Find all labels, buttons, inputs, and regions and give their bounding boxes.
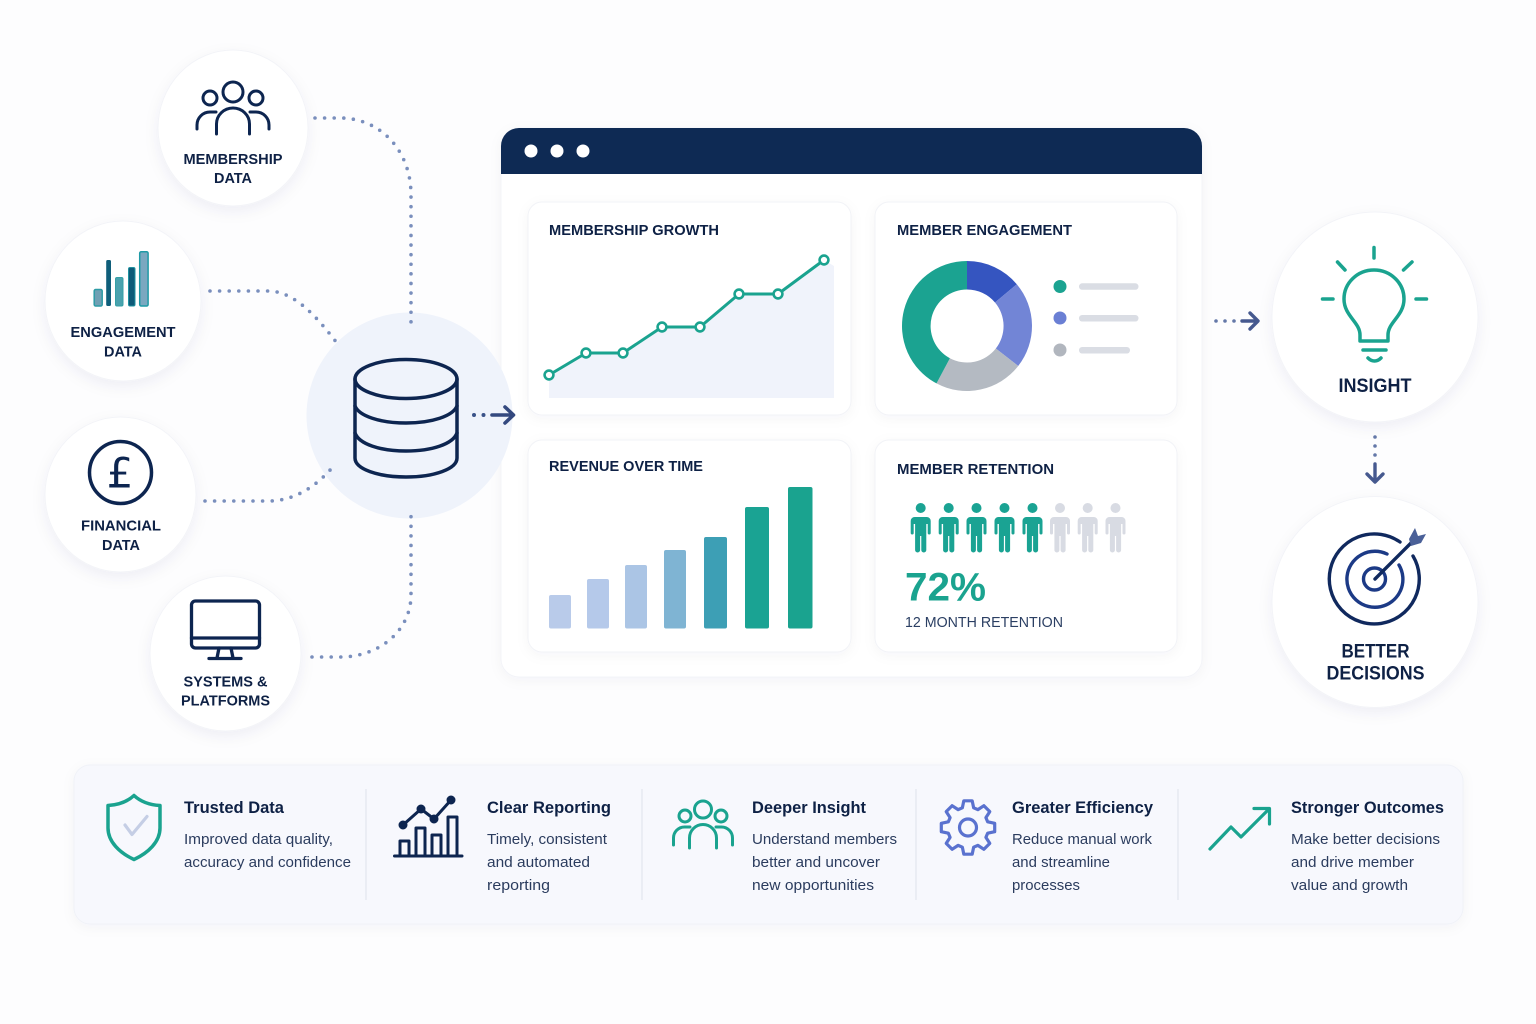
description: and drive member	[1291, 854, 1414, 871]
icon: pound coin	[90, 442, 152, 504]
label: FINANCIAL	[81, 518, 161, 534]
label: DATA	[214, 170, 252, 187]
heading: MEMBER ENGAGEMENT	[897, 222, 1072, 239]
outcome: better decisions	[1272, 496, 1478, 708]
connector: membership to database	[315, 118, 411, 322]
outcome: insight	[1272, 212, 1478, 422]
icon: target with arrow	[1329, 528, 1426, 624]
icon: bar chart	[94, 252, 148, 306]
label: ENGAGEMENT	[70, 324, 176, 341]
description: Understand members	[752, 831, 897, 848]
connector: systems to database	[312, 511, 411, 657]
heading: Stronger Outcomes	[1291, 799, 1444, 817]
window title bar	[501, 128, 1202, 174]
source: financial data	[45, 417, 196, 572]
benefit: deeper insight	[674, 799, 897, 894]
panel: revenue over time	[528, 440, 851, 652]
description: new opportunities	[752, 877, 874, 894]
central database circle	[306, 312, 512, 518]
description: Improved data quality,	[184, 831, 333, 848]
description: better and uncover	[752, 854, 880, 871]
heading: MEMBER RETENTION	[897, 461, 1054, 478]
label: INSIGHT	[1338, 376, 1412, 397]
panel: dashboard window	[501, 128, 1202, 677]
connector: financial to database	[205, 469, 331, 501]
icon: pound coin: £	[107, 448, 133, 498]
heading: Trusted Data	[184, 799, 285, 817]
icon: growth arrow	[1210, 808, 1270, 849]
label: SYSTEMS &	[184, 674, 268, 690]
bar chart	[549, 487, 812, 628]
arrow: insight to better decisions	[1367, 435, 1383, 482]
description: value and growth	[1291, 877, 1408, 894]
benefit: clear reporting	[394, 797, 611, 894]
description: Make better decisions	[1291, 831, 1440, 848]
panel: member engagement	[875, 202, 1177, 415]
benefit: stronger outcomes	[1210, 799, 1444, 894]
arrow: dashboard to insight	[1214, 313, 1258, 329]
icon: people	[674, 801, 732, 848]
description: and automated	[487, 854, 590, 871]
label: MEMBERSHIP	[184, 151, 282, 168]
icon: report chart	[394, 797, 462, 856]
icon: gear	[941, 801, 995, 854]
icon: monitor	[192, 601, 260, 658]
description: and streamline	[1012, 854, 1110, 871]
heading: Greater Efficiency	[1012, 799, 1154, 817]
label: DATA	[102, 537, 140, 554]
label: DECISIONS	[1326, 664, 1424, 684]
source: membership data	[158, 50, 308, 206]
arrow: database to dashboard	[472, 407, 514, 423]
benefit: greater efficiency	[941, 799, 1154, 894]
pictogram: 8 people, 5 retained	[911, 503, 1126, 552]
panel: membership growth	[528, 202, 851, 415]
description: Timely, consistent	[487, 831, 608, 848]
label: BETTER	[1342, 642, 1410, 662]
description: reporting	[487, 877, 550, 894]
icon: light bulb	[1322, 248, 1426, 361]
label: DATA	[104, 344, 142, 360]
icon: shield	[108, 796, 160, 860]
benefit: trusted data	[108, 796, 351, 871]
source: engagement data	[45, 221, 201, 381]
legend	[1054, 280, 1138, 356]
heading: MEMBERSHIP GROWTH	[549, 222, 719, 239]
heading: Clear Reporting	[487, 799, 611, 817]
panel: benefits strip	[74, 765, 1463, 924]
connector: engagement to database	[210, 291, 340, 347]
donut chart	[902, 261, 1032, 391]
caption: 12 MONTH RETENTION	[905, 614, 1063, 631]
heading: Deeper Insight	[752, 799, 866, 817]
source: systems and platforms	[150, 576, 301, 731]
description: Reduce manual work	[1012, 831, 1152, 848]
big number: 72%	[905, 566, 986, 610]
heading: REVENUE OVER TIME	[549, 458, 703, 475]
icon: members group	[197, 82, 269, 134]
description: accuracy and confidence	[184, 854, 351, 871]
label: PLATFORMS	[181, 692, 270, 710]
line chart	[545, 256, 834, 398]
icon: database	[355, 360, 457, 477]
description: processes	[1012, 877, 1080, 894]
panel: member retention	[875, 440, 1177, 652]
